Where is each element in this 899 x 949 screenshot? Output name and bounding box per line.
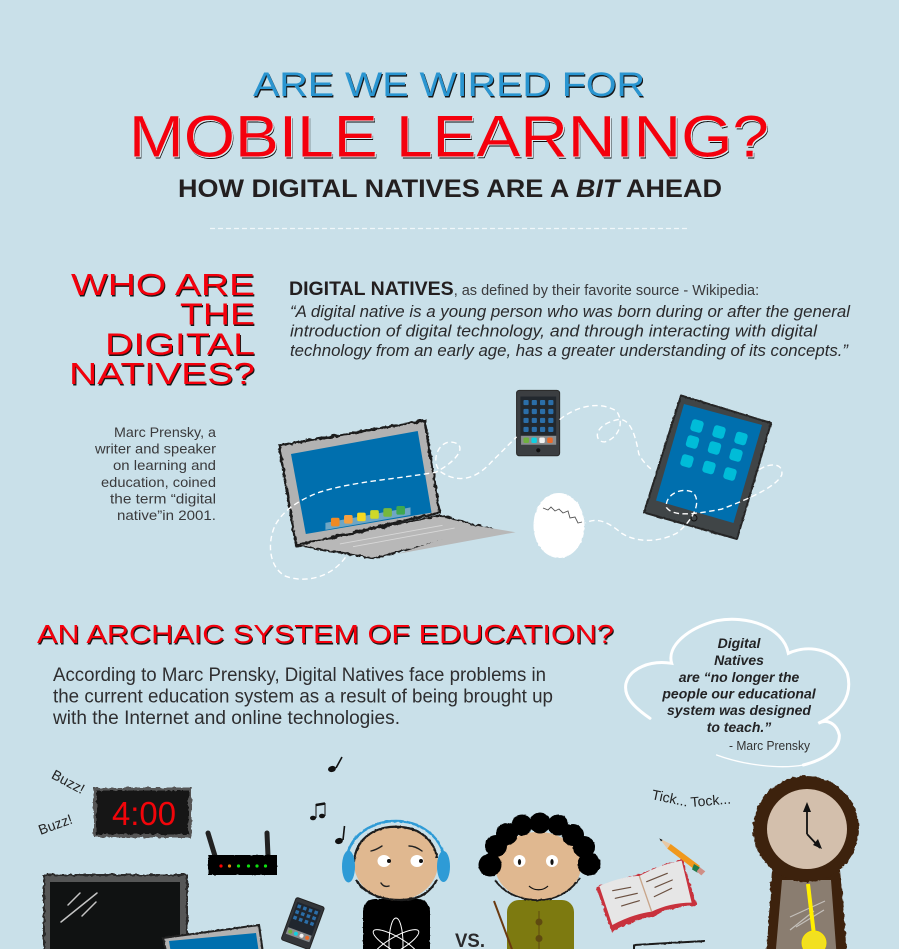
heading: archaic system: AN ARCHAIC SYSTEM OF EDUCATION? (37, 619, 614, 649)
small laptop (163, 925, 264, 949)
definition quote: introduction of digital technology, and through interacting with digital (290, 322, 818, 340)
education paragraph: with the Internet and online technologies. (52, 708, 400, 729)
heading: who are the digital natives: DIGITAL (105, 326, 255, 362)
definition quote: “A digital native is a young person who was born during or after the general (290, 302, 851, 321)
cloud quote text (661, 635, 817, 735)
digital alarm clock (95, 789, 190, 836)
heading: who are the digital natives: NATIVES? (69, 356, 255, 391)
tablet (644, 396, 771, 539)
definition quote: technology from an early age, has a greater understanding of its concepts.” (290, 341, 849, 360)
teacher pointer (494, 901, 513, 949)
tick tock label (650, 786, 732, 810)
router (208, 833, 277, 875)
sketched board edge (634, 941, 705, 949)
beamed notes (310, 803, 325, 820)
buzz labels: Buzz! (49, 766, 88, 797)
marc prensky note: writer and speaker (94, 440, 216, 456)
cloud quote text: people our educational (661, 686, 817, 702)
student character with headphones (342, 821, 450, 949)
definition lead line: DIGITAL NATIVES, as defined by their favorite source - Wikipedia: (289, 278, 759, 300)
cloud quote (626, 619, 849, 767)
heading: who are the digital natives: THE (180, 296, 255, 332)
buzz labels: Buzz! (36, 811, 74, 838)
digital alarm clock: 4:00 (112, 795, 176, 832)
title line: are we wired for: ARE WE WIRED FOR (253, 66, 645, 104)
device illustration (270, 390, 782, 579)
marc prensky note: Marc Prensky, a (114, 424, 216, 440)
marc prensky note: on learning and (113, 457, 216, 473)
music notes (310, 757, 344, 845)
student head (354, 826, 438, 900)
tick tock label: Tick... (650, 786, 690, 810)
cloud quote text: Natives (714, 652, 764, 668)
tick tock label: Tock... (690, 791, 732, 810)
pendulum (802, 884, 826, 949)
laptop (279, 421, 516, 558)
education paragraph: the current education system as a result of being brought up (53, 686, 553, 708)
title block (129, 66, 769, 203)
grandfather clock (753, 776, 859, 949)
teacher body (507, 900, 574, 949)
clock case (766, 870, 848, 949)
marc prensky note: the term “digital (110, 490, 216, 506)
cloud quote text: to teach.” (707, 719, 771, 735)
note three (334, 826, 344, 845)
teacher head (478, 812, 600, 900)
marc prensky note: native”in 2001. (117, 507, 216, 523)
subtitle: HOW DIGITAL NATIVES ARE A BIT AHEAD (178, 175, 722, 203)
definition text (289, 278, 851, 360)
marc prensky note: education, coined (101, 474, 216, 490)
headphones (342, 821, 450, 882)
education paragraph (52, 665, 553, 729)
egg (534, 493, 584, 558)
cloud quote text: Digital (718, 635, 761, 651)
flat screen tv (44, 875, 187, 949)
heading: who are the digital natives (69, 267, 255, 391)
pencil (659, 838, 705, 875)
open book (596, 859, 697, 932)
cloud quote text: are “no longer the (679, 669, 799, 685)
cloud attribution: - Marc Prensky (729, 739, 811, 753)
marc prensky note (94, 424, 216, 523)
education paragraph: According to Marc Prensky, Digital Natives face problems in (53, 665, 546, 686)
heading: who are the digital natives: WHO ARE (71, 267, 255, 302)
teacher character (478, 812, 600, 949)
cloud quote text: system was designed (667, 702, 811, 718)
buzz labels (36, 766, 88, 838)
student shirt (363, 899, 430, 949)
clock face (753, 776, 859, 882)
dashed flight path (270, 406, 782, 579)
cloud outline (626, 619, 849, 767)
tilted phone (281, 897, 325, 949)
note one (327, 757, 342, 773)
definition quote (290, 302, 851, 360)
phone (517, 390, 560, 456)
title line: mobile learning: MOBILE LEARNING? (129, 104, 769, 170)
